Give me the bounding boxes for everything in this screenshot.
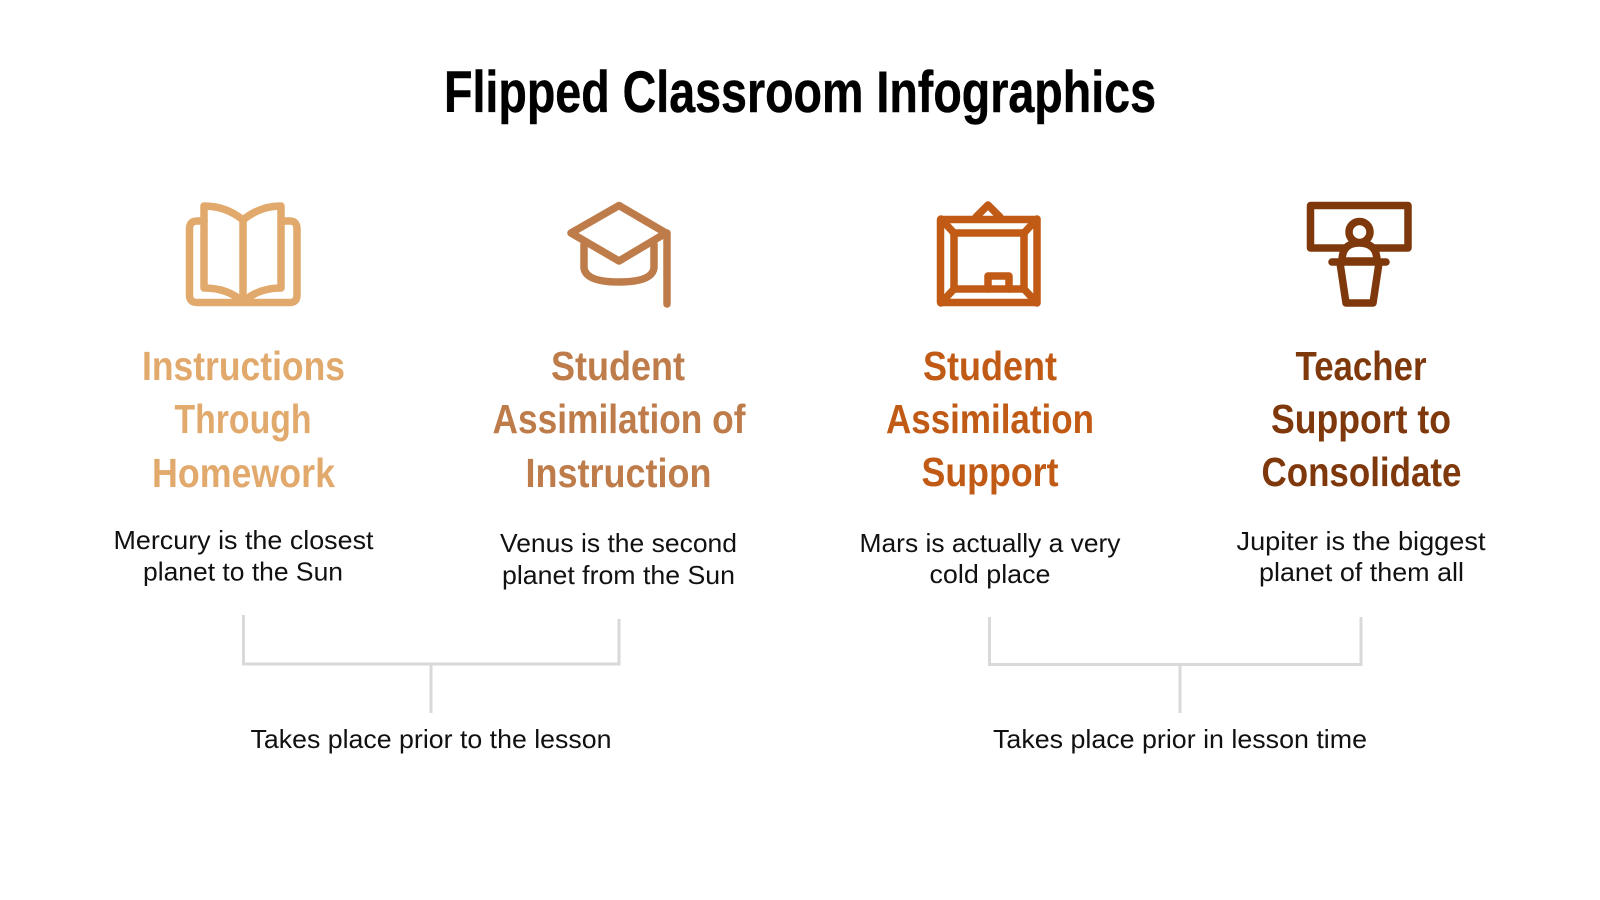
description: planet of them all xyxy=(1259,557,1464,587)
heading: Through xyxy=(174,396,312,442)
heading: Support xyxy=(922,449,1059,495)
icon: graduation cap xyxy=(571,206,667,304)
heading: Assimilation xyxy=(886,396,1094,442)
heading: Assimilation of xyxy=(492,396,746,442)
description xyxy=(860,528,1120,589)
heading: Student xyxy=(551,343,685,389)
description: Mars is actually a very xyxy=(860,528,1120,558)
icon: framed board xyxy=(940,205,1037,303)
heading: Consolidate xyxy=(1262,449,1462,495)
heading: Instruction xyxy=(526,450,712,496)
description: Jupiter is the biggest xyxy=(1236,526,1486,556)
panel: instructions through homework xyxy=(114,206,374,586)
description: planet to the Sun xyxy=(143,556,343,586)
panel: teacher support to consolidate xyxy=(1236,206,1486,587)
heading: Homework xyxy=(152,450,335,496)
description xyxy=(1236,526,1486,587)
description: planet from the Sun xyxy=(502,560,735,590)
description: cold place xyxy=(930,559,1050,589)
panel: student assimilation support xyxy=(860,205,1120,589)
bracket: left pair xyxy=(244,615,619,713)
description xyxy=(500,528,737,590)
heading xyxy=(1262,343,1462,495)
caption: before lesson: Takes place prior to the lesson xyxy=(250,724,612,754)
icon: open book xyxy=(190,206,297,302)
heading: Teacher xyxy=(1296,343,1427,389)
heading: Instructions xyxy=(142,343,345,389)
bracket: right pair xyxy=(990,617,1361,713)
heading xyxy=(142,343,345,496)
description xyxy=(114,525,374,586)
heading: Support to xyxy=(1271,396,1451,442)
heading xyxy=(886,343,1094,495)
title: Flipped Classroom Infographics xyxy=(444,60,1156,125)
heading xyxy=(492,343,746,496)
heading: Student xyxy=(923,343,1057,389)
icon: teacher at lectern xyxy=(1310,206,1408,303)
panel: student assimilation of instruction xyxy=(492,206,746,590)
caption: lesson time: Takes place prior in lesson time xyxy=(993,724,1367,754)
description: Mercury is the closest xyxy=(114,525,374,555)
description: Venus is the second xyxy=(500,528,737,558)
